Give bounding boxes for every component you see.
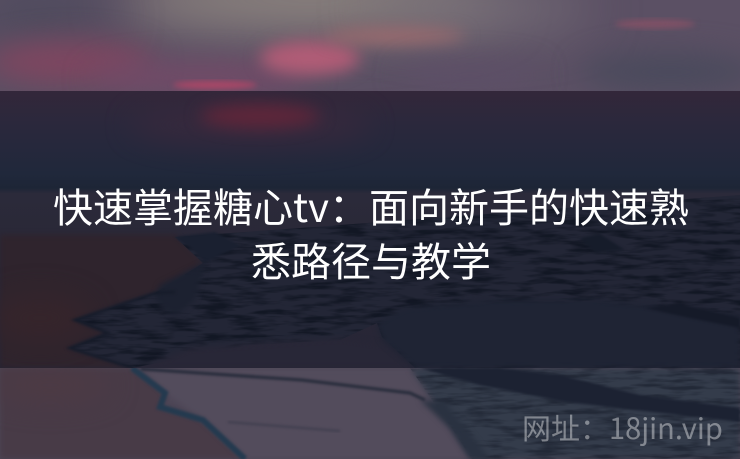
right water bbox=[410, 368, 740, 459]
watermark url: 网址：18jin.vip bbox=[522, 406, 723, 448]
sky bbox=[0, 0, 740, 94]
pale wet sand between waves bbox=[164, 339, 341, 360]
lighter lower strip bbox=[0, 368, 740, 459]
title bbox=[53, 176, 689, 288]
shoreline bbox=[67, 292, 156, 368]
dark waves bbox=[180, 232, 232, 260]
beach sand left bbox=[0, 235, 203, 368]
title: 快速掌握糖心tv：面向新手的快速熟 bbox=[53, 176, 689, 234]
darkened band: sea and beach bbox=[0, 91, 740, 368]
water patches bbox=[78, 195, 740, 368]
dark tide line bbox=[141, 369, 425, 400]
blue stream edge bbox=[132, 368, 245, 459]
title: 悉路径与教学 bbox=[251, 230, 491, 288]
